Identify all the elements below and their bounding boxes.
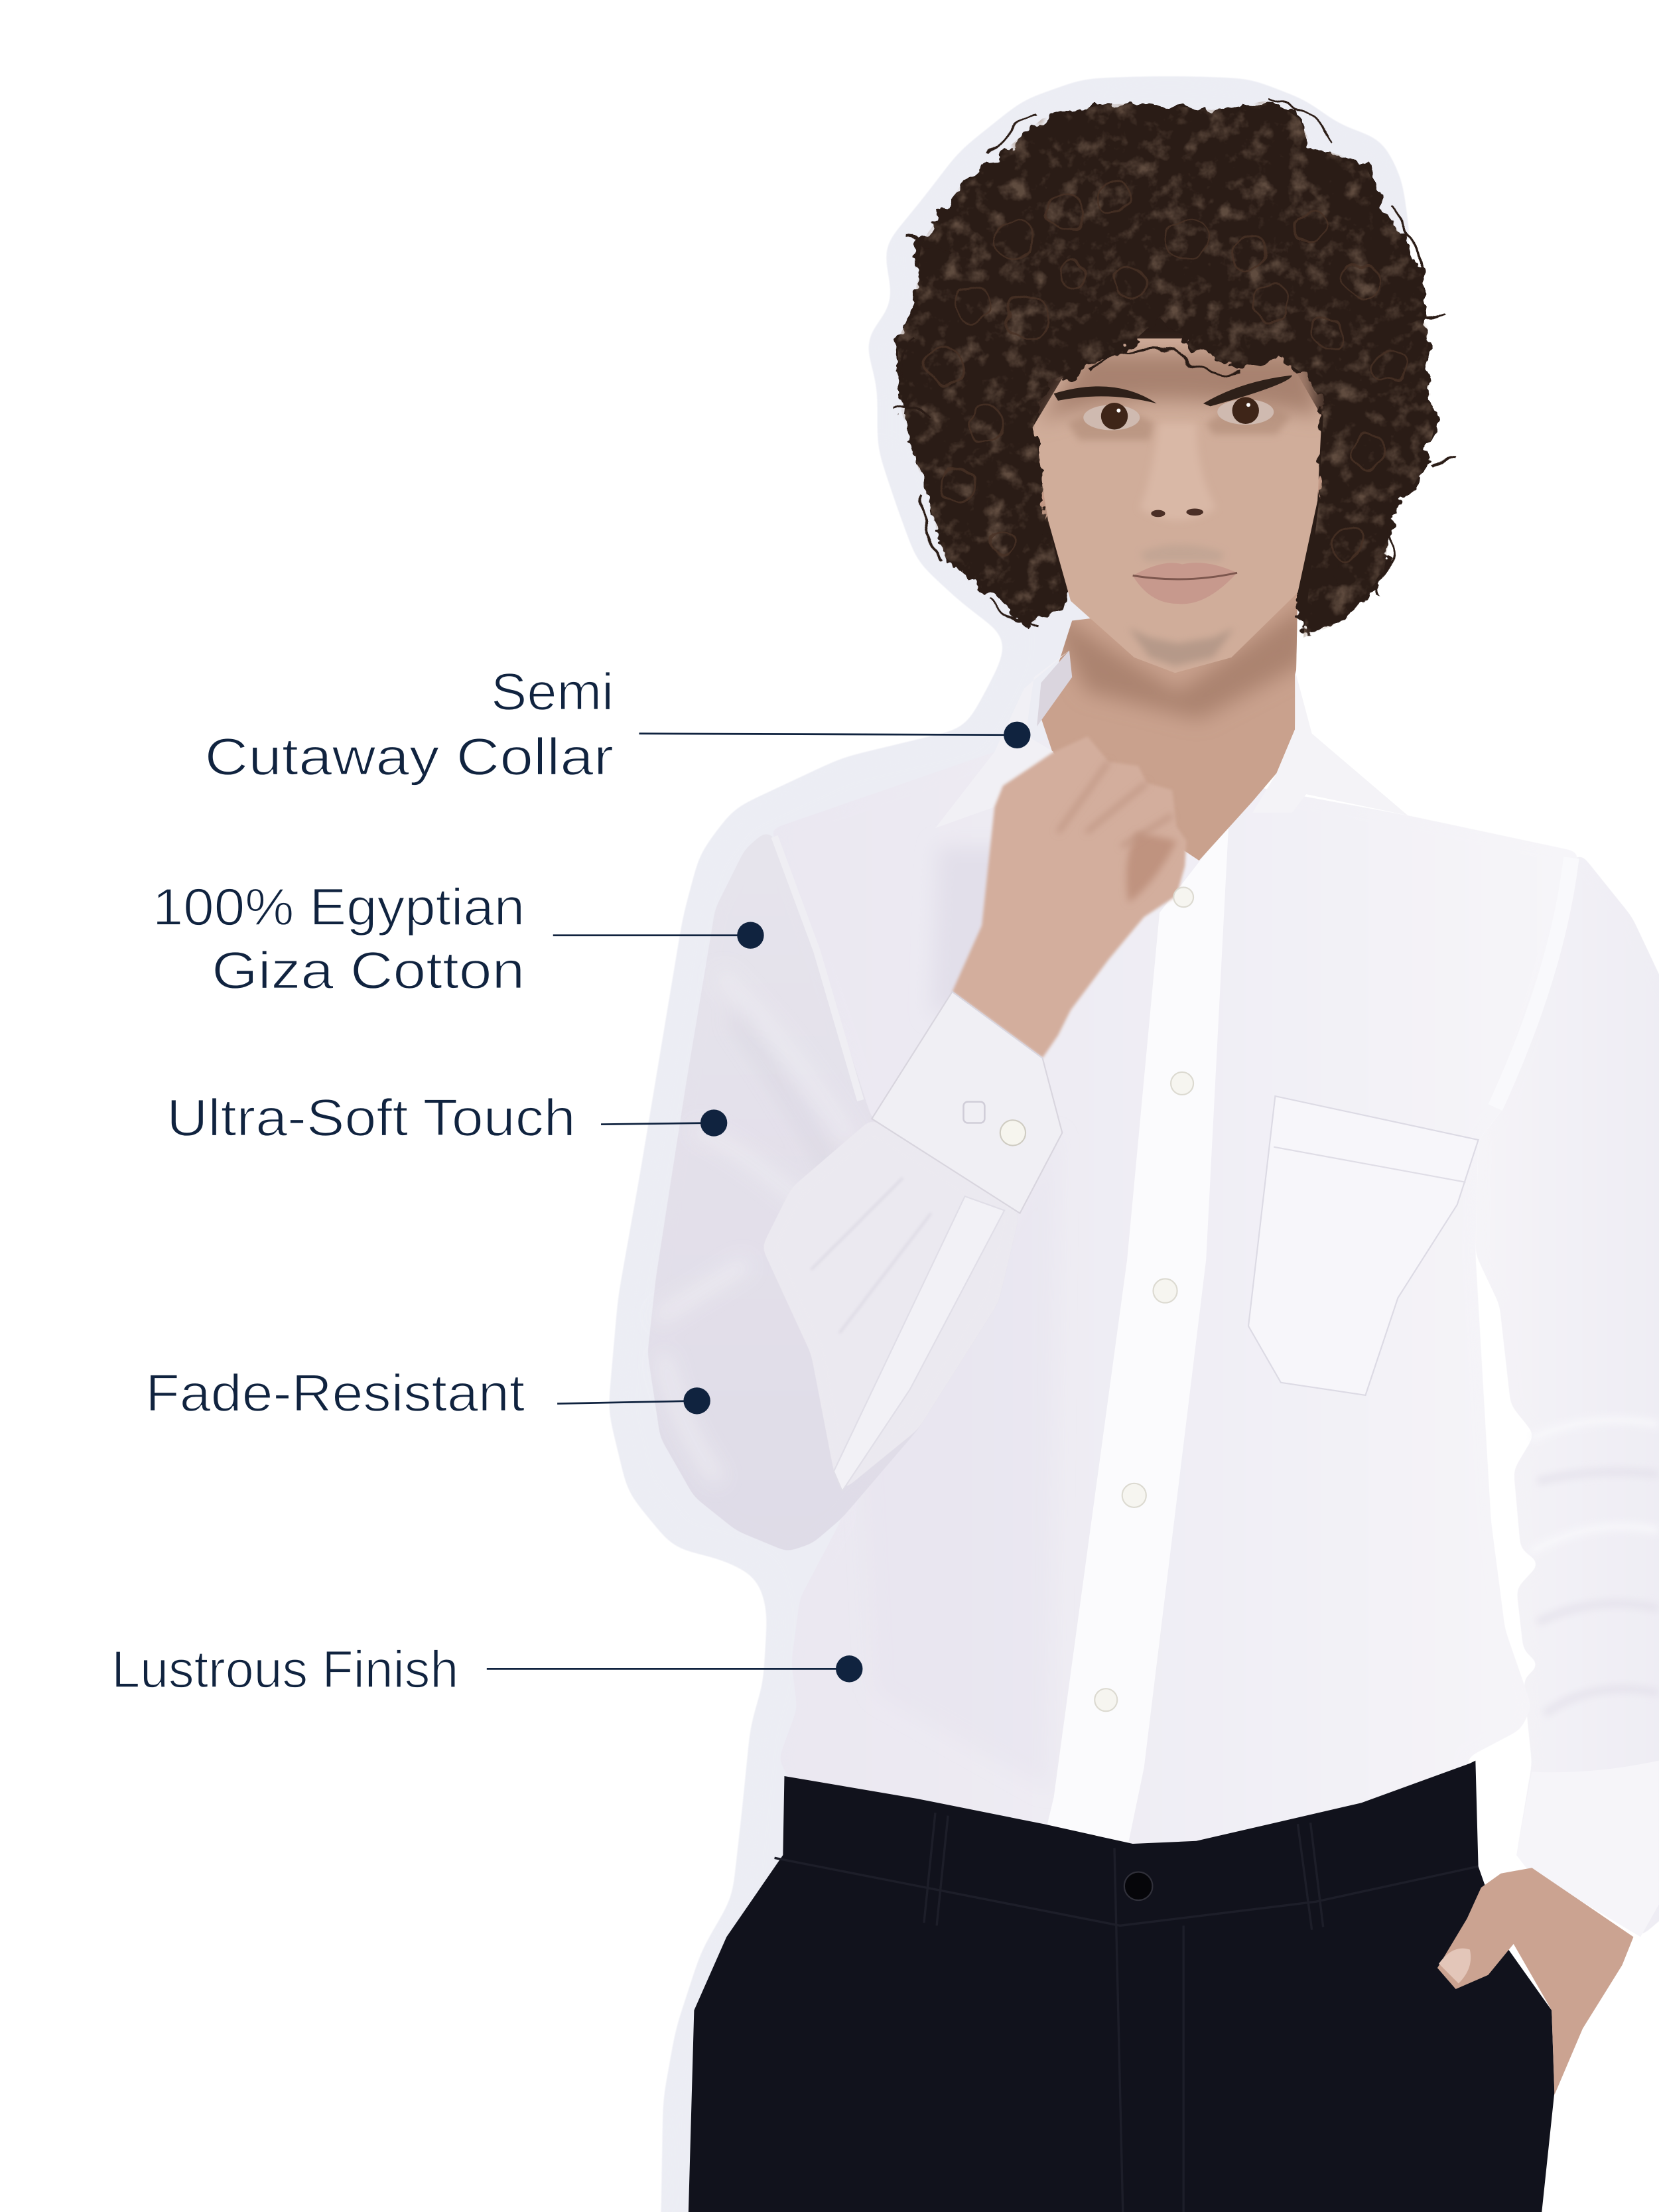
callout: 100% Egyptian Giza Cotton [153, 878, 764, 999]
torso shading [860, 847, 1058, 1791]
callout: Lustrous Finish: Lustrous Finish [111, 1640, 458, 1698]
callout: Ultra-Soft Touch [166, 1089, 727, 1147]
callout: Ultra-Soft Touch: Ultra-Soft Touch [166, 1089, 576, 1147]
trouser button [1124, 1872, 1152, 1900]
stray hair wisps [896, 99, 1456, 628]
callout: 100% Egyptian Giza Cotton: Giza Cotton [212, 941, 525, 999]
shirt buttons [1095, 887, 1193, 1711]
figure: man in white shirt [647, 85, 1659, 2212]
yoke seam [1495, 858, 1571, 1107]
pocket hand [1437, 1868, 1633, 2095]
hair back [897, 100, 1436, 638]
right collar [1252, 670, 1408, 815]
forearm [762, 1119, 1020, 1491]
hand at collar [952, 736, 1186, 1058]
armhole seam [775, 837, 860, 1100]
left eye [1083, 403, 1140, 431]
mouth [1133, 563, 1237, 604]
left sleeve shading and folds [656, 973, 854, 1482]
callout: Semi Cutaway Collar: Semi [491, 663, 614, 721]
left sleeve [647, 831, 1020, 1552]
callout: Semi Cutaway Collar: Cutaway Collar [205, 727, 614, 786]
right eye [1217, 397, 1274, 425]
neck [1041, 592, 1312, 861]
right eyebrow [1203, 376, 1292, 406]
left collar [935, 650, 1069, 828]
right arm sleeve [1475, 852, 1659, 1937]
left eyebrow [1054, 386, 1157, 403]
inner collar [1037, 650, 1072, 726]
chest pocket [1248, 1096, 1479, 1395]
right sleeve cuff [1516, 1761, 1659, 1937]
callout: Semi Cutaway Collar [205, 663, 1030, 786]
placket [1047, 824, 1228, 1842]
callout: Fade-Resistant [145, 1363, 710, 1422]
face [1033, 338, 1322, 673]
callout: 100% Egyptian Giza Cotton: 100% Egyptian [153, 878, 525, 936]
callout: Lustrous Finish [111, 1640, 862, 1698]
shirt cuff [872, 992, 1062, 1213]
torso [766, 734, 1580, 1876]
nose [1140, 423, 1216, 521]
callout: Fade-Resistant: Fade-Resistant [145, 1363, 525, 1422]
ears [1022, 485, 1049, 525]
hair front and curls [875, 85, 1456, 649]
right sleeve folds [1530, 1420, 1659, 1714]
sleeve placket [834, 1196, 1004, 1491]
silhouette halo [608, 76, 1411, 2212]
trousers [689, 1761, 1554, 2212]
